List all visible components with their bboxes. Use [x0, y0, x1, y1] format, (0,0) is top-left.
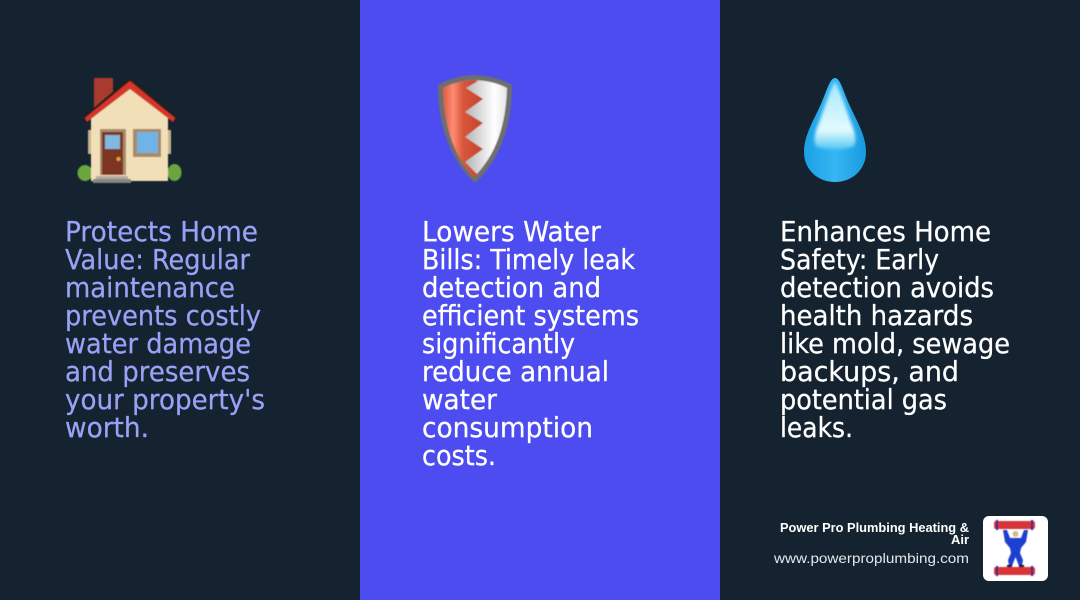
- text block: lowers water bills: [422, 216, 639, 472]
- icon: shield: [438, 75, 512, 183]
- text block: enhances home safety: Enhances Home: [780, 216, 991, 248]
- text block: protects home value: your property's: [65, 384, 265, 416]
- text block: protects home value: and preserves: [65, 356, 250, 388]
- footer: company name: [780, 520, 969, 547]
- text block: protects home value: water damage: [65, 328, 251, 360]
- panel: right background: [720, 0, 1080, 600]
- text block: enhances home safety: potential gas: [780, 384, 947, 416]
- footer: company name: Air: [951, 532, 969, 547]
- text block: enhances home safety: leaks.: [780, 412, 853, 444]
- text block: enhances home safety: Safety: Early: [780, 244, 939, 276]
- text block: lowers water bills: costs.: [422, 440, 496, 472]
- icon: water drop: [804, 78, 866, 182]
- text block: lowers water bills: significantly: [422, 328, 575, 360]
- text block: enhances home safety: backups, and: [780, 356, 959, 388]
- text block: lowers water bills: Bills: Timely leak: [422, 244, 635, 276]
- text block: protects home value: Value: Regular: [65, 244, 251, 276]
- text block: protects home value: worth.: [65, 412, 149, 444]
- text block: lowers water bills: water: [422, 384, 498, 416]
- footer: website: www.powerproplumbing.com: [773, 550, 969, 566]
- panel: middle background: [360, 0, 720, 600]
- text block: enhances home safety: [780, 216, 1010, 444]
- text block: protects home value: [65, 216, 265, 444]
- text block: enhances home safety: detection avoids: [780, 272, 994, 304]
- text block: enhances home safety: like mold, sewage: [780, 328, 1010, 360]
- text block: protects home value: prevents costly: [65, 300, 261, 332]
- text block: protects home value: Protects Home: [65, 216, 258, 248]
- text block: lowers water bills: detection and: [422, 272, 601, 304]
- footer: company name: Power Pro Plumbing Heating &: [780, 520, 969, 535]
- text block: lowers water bills: efficient systems: [422, 300, 639, 332]
- icon: house: [78, 77, 182, 183]
- logo: power pro plumbing: [983, 516, 1048, 581]
- text block: enhances home safety: health hazards: [780, 300, 973, 332]
- text block: protects home value: maintenance: [65, 272, 235, 304]
- text block: lowers water bills: Lowers Water: [422, 216, 602, 248]
- text block: lowers water bills: reduce annual: [422, 356, 609, 388]
- panel: left background: [0, 0, 360, 600]
- text block: lowers water bills: consumption: [422, 412, 593, 444]
